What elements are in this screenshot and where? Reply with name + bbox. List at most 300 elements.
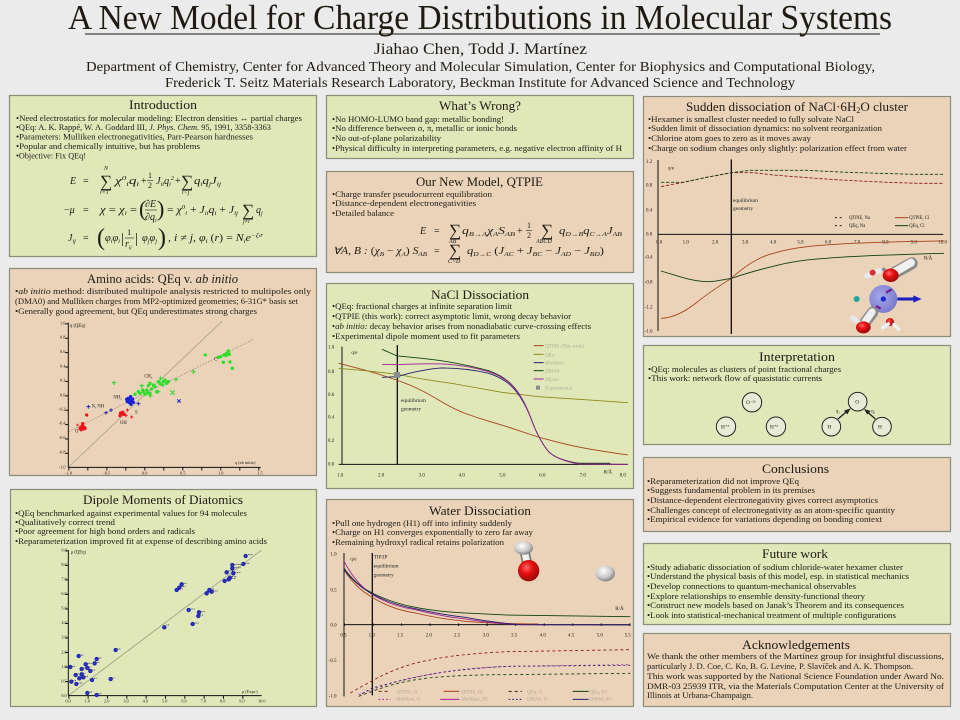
heading: what's wrong: What’s Wrong? bbox=[439, 98, 521, 113]
chart: cluster charges vs distance: 1.0 bbox=[683, 240, 689, 245]
panel: dipole moments bbox=[10, 490, 316, 706]
heading: introduction: Introduction bbox=[129, 97, 198, 112]
chart: water charges vs distance: 0.5 bbox=[340, 634, 347, 639]
chart: amino acid charges scatter: 1.0 bbox=[218, 470, 223, 475]
chart: cluster charges vs distance: 10.0 bbox=[938, 240, 948, 245]
equations: QEq energy: , i ≠ j, φ bbox=[168, 233, 200, 244]
equations: QTPIE: ) bbox=[600, 246, 604, 257]
chart: dipole moments scatter: 10.0 bbox=[258, 698, 266, 703]
icon: water molecule dissociating bbox=[514, 541, 615, 581]
equations: QTPIE bbox=[333, 221, 622, 265]
chart: water charges vs distance: 5.0 bbox=[597, 634, 603, 639]
bullets: future work: •Construct new models based on Janak’s Theorem and its consequences bbox=[647, 601, 904, 610]
equations: QEq energy: q bbox=[129, 176, 136, 187]
chart: water charges vs distance: 2.0 bbox=[426, 634, 432, 639]
heading: amino acids: Amino acids: QEq v. ab initio bbox=[87, 271, 238, 286]
equations: QEq energy: ∑ bbox=[181, 172, 193, 191]
bullets: dipole moments: •Reparameterization improved fit at expense of describing amino acids bbox=[15, 537, 267, 546]
chart: dipole moments scatter: 8.0 bbox=[220, 698, 225, 703]
bullets: introduction: •QEq: A. K. Rappé, W. A. Goddard III, J. Phys. Chem. 95, 1991, 3358-3363 bbox=[16, 123, 271, 132]
chart: NaCl charge vs distance: Mulliken bbox=[545, 362, 564, 367]
chart: water charges vs distance: 1.0 bbox=[369, 634, 375, 639]
chart: dipole moments scatter: 0.5 bbox=[61, 678, 67, 683]
bullets: conclusions bbox=[647, 477, 895, 524]
bullets: dipole moments bbox=[15, 509, 267, 546]
equations: QEq energy: + bbox=[175, 176, 181, 187]
chart: cluster charges vs distance: 4.0 bbox=[770, 240, 777, 245]
chart: amino acid charges scatter: 1.5 bbox=[257, 470, 263, 475]
bullets: what's wrong: •Physical difficulty in interpreting parameters, e.g. negative electron affinity of H bbox=[332, 144, 622, 153]
chart: NaCl charge vs distance: 0.4 bbox=[328, 416, 335, 421]
equations: QEq energy: ( bbox=[208, 233, 215, 244]
panel: our new model bbox=[326, 172, 634, 272]
bullets: our new model bbox=[332, 190, 492, 218]
chart: water charges vs distance: 1.5 bbox=[397, 634, 404, 639]
panel: NaCl dissociation bbox=[326, 284, 634, 488]
chart: cluster charges vs distance: QEq, Na bbox=[849, 224, 865, 229]
bullets: future work bbox=[647, 563, 909, 620]
bullets: sudden dissociation: •Charge on sodium changes only slightly: polarization effect from water bbox=[648, 144, 907, 153]
chart: water charges vs distance: 1.0 bbox=[330, 552, 337, 557]
chart: cluster charges vs distance: -0.8 bbox=[645, 281, 653, 286]
bullets: amino acids: •Generally good agreement, but QEq underestimates strong charges bbox=[15, 307, 257, 316]
chart: amino acid charges scatter: S bbox=[135, 410, 138, 415]
chart: amino acid charges scatter: N, NH bbox=[92, 405, 105, 410]
heading: sudden dissociation: O cluster bbox=[860, 99, 909, 114]
equations: QEq energy: i bbox=[169, 182, 171, 188]
equations: QTPIE: E bbox=[419, 226, 426, 237]
bullets: NaCl dissociation: •QEq: fractional charges at infinite separation limit bbox=[332, 302, 513, 311]
equations: QEq energy: J bbox=[211, 176, 217, 187]
chart: water charges vs distance: 0.0 bbox=[330, 623, 337, 628]
equations: QEq energy: J bbox=[68, 233, 72, 244]
equations: QTPIE: q bbox=[467, 246, 472, 257]
bullets: water dissociation bbox=[332, 519, 533, 547]
chart: cluster charges vs distance: -1.6 bbox=[645, 329, 653, 334]
equations: QEq energy: ( bbox=[97, 225, 105, 251]
panel: future work bbox=[644, 544, 950, 624]
chart: dipole moments scatter: 4.0 bbox=[61, 620, 67, 625]
chart: dipole moments scatter: 3.0 bbox=[61, 635, 67, 640]
equations: QEq energy: i bbox=[244, 239, 246, 245]
bullets: water dissociation: •Remaining hydroxyl radical retains polarization bbox=[332, 538, 504, 547]
diagram: point charges: H⁺ᵟ bbox=[721, 424, 730, 430]
chart: cluster charges vs distance: 0.0 bbox=[656, 240, 663, 245]
equations: QEq energy: ∑ bbox=[242, 201, 254, 220]
equations: QEq energy: | bbox=[135, 231, 138, 247]
chart: amino acid charges scatter: 1.0 bbox=[60, 321, 65, 326]
chart: water charges vs distance: 0.5 bbox=[330, 588, 337, 593]
diagram: point charges bbox=[716, 393, 786, 436]
equations: QTPIE: C→A bbox=[590, 232, 607, 238]
equations: QTPIE: q bbox=[462, 226, 467, 237]
chart: dipole moments scatter bbox=[61, 548, 266, 703]
chart: NaCl charge vs distance: 3.0 bbox=[419, 474, 425, 479]
chart: dipole moments scatter: 2.0 bbox=[104, 698, 109, 703]
equations: QTPIE: BC bbox=[533, 252, 543, 258]
bullets: future work: •Study adiabatic dissociation of sodium chloride-water hexamer cluster bbox=[647, 563, 903, 572]
chart: NaCl charge vs distance: 7.0 bbox=[580, 474, 586, 479]
chart: cluster charges vs distance: 5.0 bbox=[797, 240, 804, 245]
equations: QEq energy: + bbox=[187, 205, 200, 216]
equations: QTPIE: S bbox=[498, 226, 505, 237]
equations: QTPIE: − bbox=[571, 246, 584, 257]
equations: QTPIE: J bbox=[555, 246, 560, 257]
chart: NaCl charge vs distance: equilibrium bbox=[401, 398, 427, 404]
equations: QEq energy: N bbox=[103, 166, 109, 172]
chart: cluster charges vs distance: 8.0 bbox=[882, 240, 889, 245]
chart: dipole moments scatter: 6.0 bbox=[61, 591, 67, 596]
text block: acknowledgements: We thank the other members of the Martínez group for insightful discussions, bbox=[647, 652, 944, 661]
equations: QEq energy: i bbox=[136, 182, 140, 188]
equations: QTPIE: S bbox=[413, 246, 418, 257]
chart: amino acid charges scatter: O bbox=[75, 429, 79, 434]
chart: water charges vs distance: TIP3P bbox=[374, 555, 387, 561]
chart: NaCl charge vs distance: 8.0 bbox=[620, 474, 626, 479]
equations: QEq energy: j bbox=[208, 182, 211, 188]
heading: interpretation: Interpretation bbox=[759, 349, 836, 364]
heading: dipole moments: Dipole Moments of Diatomics bbox=[83, 492, 243, 507]
chart: dipole moments scatter: 1.0 bbox=[85, 698, 90, 703]
chart: NaCl charge vs distance: 0.8 bbox=[328, 370, 335, 375]
equations: QEq energy: E bbox=[69, 176, 76, 187]
chart: dipole moments scatter: 4.0 bbox=[143, 698, 148, 703]
chart: NaCl charge vs distance: 0.6 bbox=[328, 393, 335, 398]
chart: water charges vs distance: geometry bbox=[374, 572, 394, 578]
chart: dipole moments scatter: 7.0 bbox=[61, 577, 67, 582]
text block: acknowledgements: This work was supported by the National Science Foundation under Award No. bbox=[647, 672, 944, 681]
chart: amino acid charges scatter: -0.6 bbox=[59, 435, 66, 440]
diagram: charge currents: O bbox=[855, 399, 859, 405]
bullets: water dissociation: •Charge on H1 converges exponentially to zero far away bbox=[332, 528, 533, 537]
bullets: sudden dissociation bbox=[648, 115, 907, 153]
equations: QEq energy: i bbox=[200, 182, 203, 188]
bullets: future work: •Look into statistical-mechanical treatment of multiple configurations bbox=[647, 611, 896, 620]
heading: sudden dissociation: 2 bbox=[856, 106, 860, 115]
panel: what's wrong bbox=[326, 96, 634, 158]
chart: amino acid charges scatter: 0.0 bbox=[142, 470, 147, 475]
equations: QEq energy: q bbox=[164, 176, 169, 187]
equations: QTPIE: D→C bbox=[472, 252, 492, 258]
chart: amino acid charges scatter: -0.4 bbox=[59, 421, 66, 426]
diagram: charge currents: q₁ bbox=[836, 409, 840, 414]
chart: cluster charges vs distance: geometry bbox=[733, 206, 753, 212]
equations: QTPIE: = bbox=[434, 226, 440, 237]
heading: water dissociation: Water Dissociation bbox=[429, 503, 531, 518]
chart: dipole moments scatter: 6.0 bbox=[181, 698, 187, 703]
bullets: water dissociation: •Pull one hydrogen (H1) off into infinity suddenly bbox=[332, 519, 512, 528]
equations: QEq energy: χ bbox=[115, 176, 119, 187]
chart: NaCl charge vs distance: QTPIE (This work) bbox=[545, 345, 585, 350]
equations: QEq energy: j bbox=[154, 239, 157, 245]
chart: water charges vs distance: 4.5 bbox=[568, 634, 575, 639]
bullets: NaCl dissociation: •QTPIE (this work): correct asymptotic limit, wrong decay behavior bbox=[332, 312, 571, 321]
equations: QEq energy: i bbox=[111, 239, 113, 245]
chart: amino acid charges scatter: CH₂ bbox=[144, 375, 153, 380]
chart: water charges vs distance: 5.5 bbox=[625, 634, 631, 639]
diagram: point charges: H⁺ᵟ bbox=[770, 424, 779, 430]
equations: QTPIE: q bbox=[583, 226, 590, 237]
bullets: dipole moments: •Qualitatively correct trend bbox=[15, 518, 115, 527]
equations: QTPIE: ABCD bbox=[535, 239, 552, 245]
equations: QTPIE: AB bbox=[448, 239, 457, 245]
diagram: charge currents bbox=[822, 392, 891, 436]
bullets: what's wrong: •No HOMO-LUMO band gap: metallic bonding! bbox=[332, 115, 504, 124]
equations: QEq energy: j bbox=[147, 239, 150, 245]
equations: QTPIE: AC bbox=[503, 252, 515, 258]
chart: NaCl charge vs distance: Dipole bbox=[545, 378, 560, 383]
equations: QEq energy: + bbox=[216, 205, 229, 216]
chart: NaCl charge vs distance: 6.0 bbox=[539, 474, 546, 479]
equations: QTPIE: J bbox=[607, 226, 613, 237]
heading: conclusions: Conclusions bbox=[762, 461, 829, 476]
text block: acknowledgements: Illinois at Urbana-Champaign. bbox=[647, 691, 753, 700]
equations: QTPIE: = bbox=[434, 246, 440, 257]
equations: QTPIE: ∑ bbox=[449, 221, 461, 240]
equations: QTPIE: C<D bbox=[448, 259, 461, 265]
bullets: sudden dissociation: •Sudden limit of dissociation dynamics: no solvent reorganization bbox=[648, 124, 882, 133]
chart: water charges vs distance: QEq, H1 bbox=[590, 690, 608, 695]
icon: NaCl hexamer cluster bbox=[853, 263, 922, 333]
equations: QTPIE: + bbox=[514, 246, 527, 257]
chart: cluster charges vs distance: QEq, Cl bbox=[909, 224, 925, 229]
equations: QTPIE: J bbox=[527, 246, 531, 257]
bullets: introduction: •Popular and chemically intuitive, but has problems bbox=[16, 142, 200, 151]
affiliations: Frederick T. Seitz Materials Research Laboratory, Beckman Institute for Advanced Science and Technology bbox=[165, 75, 795, 90]
equations: QTPIE: AB bbox=[417, 252, 427, 258]
equations: QEq energy: i bbox=[206, 239, 208, 245]
equations: QTPIE: 2 bbox=[527, 231, 531, 240]
equations: QTPIE: ∑ bbox=[449, 241, 461, 260]
chart: amino acid charges scatter: C bbox=[214, 358, 217, 363]
equations: QEq energy: = bbox=[83, 233, 89, 244]
bullets: conclusions: •Suggests fundamental problem in its premises bbox=[647, 486, 815, 495]
chart: water charges vs distance: 2.5 bbox=[454, 634, 461, 639]
chart: NaCl charge vs distance: 1.0 bbox=[328, 346, 335, 351]
chart: dipole moments scatter: 5.0 bbox=[61, 606, 67, 611]
chart: cluster charges vs distance: equilibrium bbox=[733, 198, 759, 204]
equations: QEq energy: | bbox=[121, 231, 124, 247]
bullets: NaCl dissociation bbox=[332, 302, 591, 341]
chart: NaCl charge vs distance: geometry bbox=[401, 407, 421, 413]
bullets: conclusions: •Empirical evidence for variations depending on bonding context bbox=[647, 515, 883, 524]
panel: conclusions bbox=[644, 458, 950, 532]
equations: QEq energy: 2 bbox=[171, 176, 174, 182]
equations: QTPIE: BD bbox=[590, 252, 601, 258]
bullets: our new model: •Charge transfer pseudocurrent equilibration bbox=[332, 190, 492, 199]
equations: QEq energy: q bbox=[256, 205, 261, 216]
chart: NaCl charge vs distance: q/e bbox=[351, 351, 358, 356]
equations: QTPIE: A bbox=[492, 232, 499, 238]
chart: water charges vs distance: R/Å bbox=[615, 606, 624, 612]
equations: QEq energy: q bbox=[203, 176, 209, 187]
chart: NaCl charge vs distance: QEq bbox=[545, 353, 555, 358]
chart: cluster charges vs distance: q/e bbox=[668, 167, 675, 172]
equations: QEq energy: ij bbox=[72, 239, 76, 245]
equations: QEq energy: i bbox=[118, 239, 120, 245]
equations: QEq energy: φ bbox=[105, 233, 111, 244]
equations: QEq energy: 0 bbox=[122, 176, 126, 182]
heading: our new model: Our New Model, QTPIE bbox=[416, 174, 543, 189]
equations: QEq energy: i bbox=[215, 211, 217, 217]
equations: QTPIE: B bbox=[380, 252, 384, 258]
equations: QEq energy: i bbox=[185, 211, 188, 217]
chart: dipole moments scatter: 8.0 bbox=[61, 562, 67, 567]
equations: QEq energy: = bbox=[83, 176, 89, 187]
bullets: what's wrong: •No out-of-plane polarizability bbox=[332, 134, 441, 143]
bullets: what's wrong: •No difference between σ, π, metallic or ionic bonds bbox=[332, 124, 517, 133]
equations: QEq energy: i bbox=[155, 218, 157, 224]
chart: NaCl charge vs distance: 1.0 bbox=[337, 474, 344, 479]
bullets: interpretation: •This work: network flow of quasistatic currents bbox=[648, 374, 822, 383]
equations: QEq energy: i bbox=[125, 211, 127, 217]
affiliations bbox=[86, 59, 875, 90]
bullets: future work: •Understand the physical basis of this model, esp. in statistical mechanics bbox=[647, 572, 909, 581]
panel: water dissociation bbox=[326, 500, 634, 706]
equations: QEq energy: −μ bbox=[64, 205, 75, 216]
bullets: sudden dissociation: •Chlorine atom goes to zero as it moves away bbox=[648, 134, 811, 143]
chart: dipole moments scatter: μ (QEq) bbox=[71, 551, 86, 556]
chart: water charges vs distance: Mulliken, O bbox=[396, 698, 421, 703]
bullets: our new model: •Distance-dependent electronegativities bbox=[332, 199, 476, 208]
equations: QTPIE: χ bbox=[486, 226, 494, 237]
equations: QTPIE: A bbox=[400, 252, 406, 258]
equations: QTPIE: B→A bbox=[469, 232, 488, 238]
equations: QEq energy: r) = N bbox=[214, 233, 242, 244]
diagram: charge currents: H bbox=[827, 424, 831, 430]
equations: QEq energy: χ = χ bbox=[100, 205, 123, 216]
chart: cluster charges vs distance: QTPIE, Cl bbox=[909, 216, 930, 221]
bullets: NaCl dissociation: •ab initio: decay behavior arises from nonadiabatic curve-crossing effects bbox=[332, 322, 591, 331]
heading: acknowledgements: Acknowledgements bbox=[742, 637, 850, 652]
chart: cluster charges vs distance: 0.0 bbox=[646, 233, 653, 238]
equations: QEq energy: ij bbox=[234, 211, 238, 217]
chart: cluster charges vs distance: 1.2 bbox=[646, 160, 653, 165]
bullets: amino acids: •ab initio method: distributed multipole analysis restricted to multipoles only bbox=[15, 287, 311, 296]
chart: cluster charges vs distance: QTPIE, Na bbox=[849, 216, 870, 221]
equations: QEq energy: q bbox=[209, 205, 215, 216]
bullets: dipole moments: •Poor agreement for high bond orders and radicals bbox=[15, 527, 195, 536]
bullets: sudden dissociation: •Hexamer is smallest cluster needed to fully solvate NaCl bbox=[648, 115, 855, 124]
equations: QTPIE: + bbox=[517, 226, 523, 237]
chart: water charges vs distance bbox=[329, 552, 631, 703]
chart: amino acid charges scatter: q (ab initio) bbox=[235, 460, 256, 465]
equations: QEq energy: ∂q bbox=[145, 212, 155, 223]
authors: Jiahao Chen, Todd J. Martínez bbox=[374, 41, 587, 58]
equations: QEq energy: = χ bbox=[167, 205, 181, 216]
chart: dipole moments scatter: 3.0 bbox=[123, 698, 129, 703]
equations: QEq energy: e bbox=[246, 233, 252, 244]
equations: QEq energy: −ζ ir bbox=[251, 233, 263, 239]
panel: sudden dissociation bbox=[644, 96, 950, 336]
chart: water charges vs distance: 3.0 bbox=[483, 634, 489, 639]
chart: NaCl charge vs distance bbox=[328, 345, 628, 479]
chart: amino acid charges scatter: 0.2 bbox=[60, 377, 65, 382]
chart: dipole moments scatter: 9.0 bbox=[239, 698, 245, 703]
chart: cluster charges vs distance: 0.8 bbox=[646, 184, 653, 189]
equations: QTPIE: − bbox=[542, 246, 555, 257]
equations: QEq energy: 2 bbox=[148, 181, 152, 190]
chart: amino acid charges scatter: 0.8 bbox=[60, 335, 65, 340]
chart: amino acid charges scatter: 0.6 bbox=[60, 349, 66, 354]
chart: water charges vs distance: -0.5 bbox=[329, 659, 337, 664]
equations: QEq energy: J bbox=[156, 176, 160, 187]
chart: water charges vs distance: DMA0, O bbox=[527, 698, 548, 703]
equations: QEq energy: r bbox=[125, 239, 129, 250]
bullets: conclusions: •Reparameterization did not improve QEq bbox=[647, 477, 799, 486]
bullets: conclusions: •Challenges concept of electronegativity as an atom-specific quantity bbox=[647, 506, 895, 515]
equations: QEq energy: q bbox=[194, 176, 199, 187]
text block: acknowledgements: particularly J. D. Coe, C. Ko, B. G. Levine, P. Slavíček and A. K. Thompson. bbox=[647, 662, 913, 671]
chart: amino acid charges scatter: OH bbox=[120, 421, 127, 426]
equations: QEq energy: φ bbox=[150, 233, 156, 244]
equations: QEq energy: 1 bbox=[127, 227, 131, 237]
bullets: introduction bbox=[16, 114, 302, 161]
chart: water charges vs distance: equilibrium bbox=[374, 564, 399, 570]
equations: QEq energy: ∑ bbox=[100, 172, 112, 191]
chart: amino acid charges scatter: -1.0 bbox=[65, 470, 72, 475]
chart: cluster charges vs distance: 2.0 bbox=[712, 240, 719, 245]
chart: water charges vs distance: QEq, O bbox=[527, 690, 543, 695]
chart: water charges vs distance: -1.0 bbox=[329, 694, 337, 699]
heading: future work: Future work bbox=[762, 546, 829, 561]
equations: QEq energy: 1 bbox=[148, 171, 152, 180]
bullets: interpretation: •QEq: molecules as clusters of point fractional charges bbox=[648, 365, 841, 374]
chart: amino acid charges scatter bbox=[59, 321, 263, 475]
heading: NaCl dissociation: NaCl Dissociation bbox=[431, 287, 530, 302]
chart: NaCl charge vs distance: 2.0 bbox=[378, 474, 385, 479]
chart: amino acid charges scatter: -0.5 bbox=[103, 470, 110, 475]
chart: dipole moments scatter: 2.0 bbox=[61, 649, 67, 654]
chart: water charges vs distance: QTPIE, O bbox=[397, 690, 418, 695]
equations: QTPIE: − bbox=[384, 246, 396, 257]
equations: QEq energy: φ bbox=[142, 233, 148, 244]
equations: QEq energy: ii bbox=[205, 211, 209, 217]
chart: NaCl charge vs distance: 0.0 bbox=[328, 462, 335, 467]
chart: water charges vs distance: 3.5 bbox=[511, 634, 518, 639]
chart: dipole moments scatter: 0.0 bbox=[61, 693, 67, 698]
equations: QEq energy: φ bbox=[112, 233, 119, 244]
chart: dipole moments scatter: 0.0 bbox=[65, 698, 71, 703]
chart: amino acid charges scatter: -0.2 bbox=[59, 406, 66, 411]
equations: QEq energy: J bbox=[229, 205, 233, 216]
equations: QTPIE: ∑ bbox=[541, 221, 553, 240]
chart: cluster charges vs distance: -0.4 bbox=[645, 256, 653, 261]
panel: interpretation bbox=[644, 346, 950, 444]
chart: amino acid charges scatter: 0.5 bbox=[180, 470, 185, 475]
equations: QTPIE: χ bbox=[396, 246, 401, 257]
chart: water charges vs distance: q/e bbox=[350, 558, 357, 563]
bullets: introduction: •Parameters: Mulliken electronegativities, Parr-Pearson hardnesses bbox=[16, 133, 253, 142]
heading: sudden dissociation: Sudden dissociation of NaCl·6H bbox=[686, 99, 855, 114]
chart: dipole moments scatter: 5.0 bbox=[162, 698, 167, 703]
chart: cluster charges vs distance: 7.0 bbox=[854, 240, 861, 245]
chart: NaCl charge vs distance: 4.0 bbox=[459, 474, 465, 479]
chart: amino acid charges scatter: 0.0 bbox=[60, 392, 65, 397]
diagram: point charges: O⁻²ᵟ bbox=[746, 400, 756, 406]
chart: cluster charges vs distance: 9.0 bbox=[911, 240, 917, 245]
equations: QEq energy: ) bbox=[158, 225, 166, 251]
chart: cluster charges vs distance: R/Å bbox=[924, 256, 933, 262]
equations: QEq energy: + bbox=[141, 176, 147, 187]
equations: QTPIE: AB bbox=[504, 232, 515, 238]
equations: QTPIE: J bbox=[498, 246, 503, 257]
chart: NaCl charge vs distance: Experimental bbox=[545, 387, 573, 392]
equations: QEq energy: i bbox=[126, 182, 129, 188]
equations: QTPIE: ( bbox=[491, 246, 499, 257]
equations: QTPIE: D→B bbox=[564, 232, 584, 238]
equations: QEq energy: ij bbox=[129, 246, 132, 251]
